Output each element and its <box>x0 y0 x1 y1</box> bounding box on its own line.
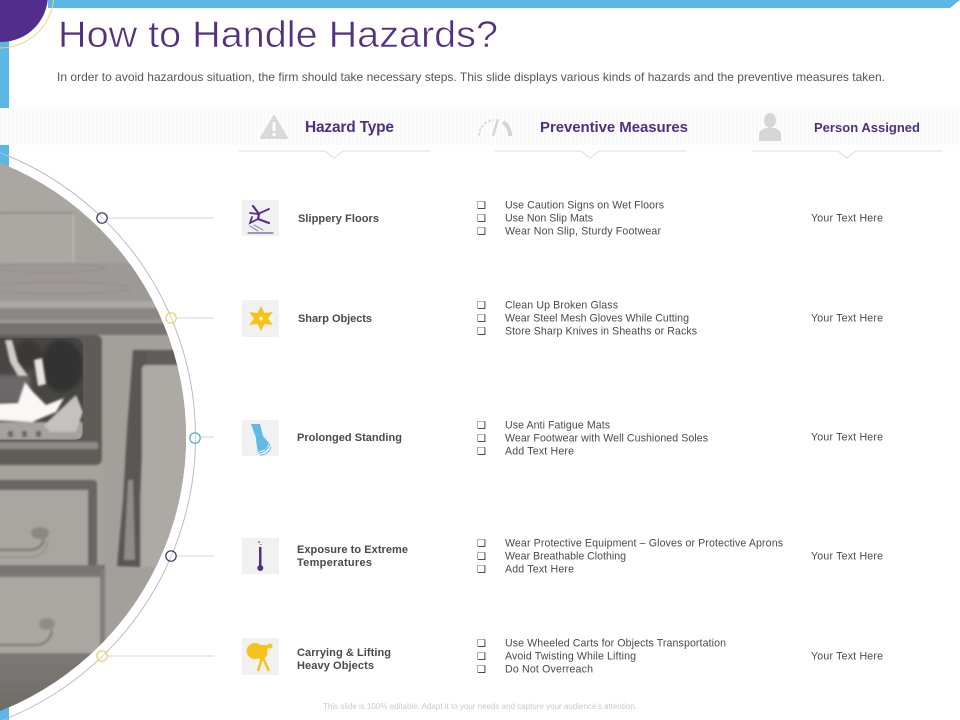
measures list: ❑ <box>477 538 486 550</box>
row: sharp objects <box>242 300 883 338</box>
photo: stove with fire in circle <box>0 162 186 712</box>
hazard label: Slippery Floors <box>298 213 379 225</box>
measures list: Wear Footwear with Well Cushioned Soles <box>505 432 708 444</box>
measures list: ❑ <box>477 214 486 224</box>
measures list: ❑ <box>477 314 486 324</box>
measures list: ❑ <box>477 638 486 650</box>
right panel <box>116 348 186 594</box>
measures list: Use Wheeled Carts for Objects Transportation <box>505 638 726 650</box>
measures list: Wear Steel Mesh Gloves While Cutting <box>505 312 689 324</box>
hazard label <box>297 647 391 672</box>
icon: sharp star <box>242 300 279 337</box>
fire window <box>0 338 83 440</box>
measures list: ❑ <box>477 326 486 338</box>
measures list: Wear Protective Equipment – Gloves or Protective Aprons <box>505 538 783 550</box>
row: extreme temperatures <box>242 538 883 576</box>
person text: Your Text Here <box>811 212 883 224</box>
measures list: Use Caution Signs on Wet Floors <box>505 200 664 212</box>
hazard label: Prolonged Standing <box>297 432 402 444</box>
measures list <box>477 638 726 676</box>
header rule <box>239 151 430 158</box>
outer ring <box>0 132 196 720</box>
lower stove <box>0 479 150 711</box>
person text: Your Text Here <box>811 550 883 562</box>
heading: preventive measures: Preventive Measures <box>540 119 688 136</box>
measures list: Use Non Slip Mats <box>505 212 593 224</box>
person text: Your Text Here <box>811 432 883 444</box>
left accent bar <box>0 0 9 720</box>
person text: Your Text Here <box>811 650 883 662</box>
column header: hazard type <box>239 116 430 158</box>
measures list: ❑ <box>477 652 486 662</box>
measures list: Wear Breathable Clothing <box>505 550 626 562</box>
measures list: ❑ <box>477 420 486 432</box>
measures list <box>477 420 708 458</box>
hazard label: Exposure to Extreme <box>297 544 408 556</box>
measures list: Use Anti Fatigue Mats <box>505 420 610 432</box>
row: carrying and lifting <box>242 638 883 676</box>
measures list: Avoid Twisting While Lifting <box>505 650 636 662</box>
icon: foot <box>242 420 279 456</box>
header band <box>0 108 960 145</box>
icon: slipping person <box>242 200 279 236</box>
hazard label: Carrying & Lifting <box>297 647 391 659</box>
measures list: ❑ <box>477 552 486 562</box>
hazard label <box>297 544 408 569</box>
header rule <box>495 151 686 158</box>
subtitle: In order to avoid hazardous situation, the firm should take necessary steps. This slide displays various kinds of hazards and the preventive measures taken. <box>57 70 885 84</box>
hazard label: Sharp Objects <box>298 313 372 325</box>
measures list: Do Not Overreach <box>505 664 593 676</box>
measures list <box>477 538 783 576</box>
top accent bar <box>48 0 960 8</box>
measures list: ❑ <box>477 664 486 676</box>
person text: Your Text Here <box>811 312 883 324</box>
heading: hazard type: Hazard Type <box>305 119 394 136</box>
connector lines <box>108 218 214 656</box>
measures list: ❑ <box>477 200 486 212</box>
measures list <box>477 200 664 238</box>
row: slippery floors <box>242 200 883 238</box>
ring markers <box>97 213 200 661</box>
measures list: Store Sharp Knives in Sheaths or Racks <box>505 326 697 338</box>
column header: preventive measures <box>479 119 688 158</box>
measures list <box>477 300 697 338</box>
column header: person assigned <box>752 113 943 158</box>
hazard label: Heavy Objects <box>297 660 374 672</box>
row: prolonged standing <box>242 420 883 458</box>
icon: warning triangle <box>261 116 287 138</box>
icon: thermometer <box>242 538 279 574</box>
measures list: Wear Non Slip, Sturdy Footwear <box>505 226 661 238</box>
measures list: Add Text Here <box>505 446 574 458</box>
measures list: ❑ <box>477 300 486 312</box>
measures list: Add Text Here <box>505 564 574 576</box>
title: How to Handle Hazards? <box>58 14 498 55</box>
icon: gauge <box>479 119 510 136</box>
heading: person assigned: Person Assigned <box>814 120 920 135</box>
footer note: This slide is 100% editable. Adapt it to your needs and capture your audience's attention. <box>323 702 637 711</box>
measures list: ❑ <box>477 446 486 458</box>
measures list: Clean Up Broken Glass <box>505 300 618 312</box>
corner purple circle <box>0 0 54 48</box>
measures list: ❑ <box>477 226 486 238</box>
header rule <box>752 151 943 158</box>
icon: person <box>759 113 781 141</box>
measures list: ❑ <box>477 434 486 444</box>
hazard label: Temperatures <box>297 557 372 569</box>
icon: person carrying load <box>242 638 279 675</box>
measures list: ❑ <box>477 564 486 576</box>
